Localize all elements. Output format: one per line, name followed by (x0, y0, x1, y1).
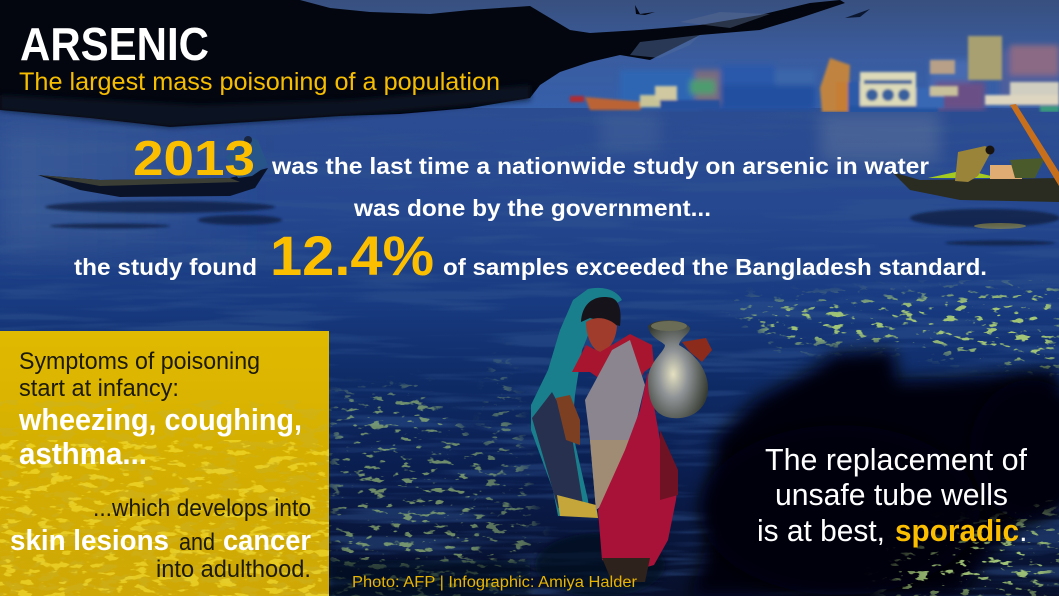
oar (1010, 104, 1059, 186)
dark shadow lower right (330, 350, 1059, 596)
text: symptoms intro: start at infancy: (19, 375, 179, 402)
text: later development: skin lesions (10, 525, 169, 557)
lower dark reflection (535, 533, 665, 596)
text: early symptoms (18, 402, 302, 471)
text: symptoms intro (19, 348, 260, 402)
raised hand (556, 395, 580, 445)
callout: tube wells: is at best, (757, 513, 885, 548)
scarf (531, 288, 622, 516)
vendor (955, 146, 992, 182)
big number: 2013: 2013 (133, 132, 255, 186)
callout: tube wells: The replacement of (765, 442, 1027, 477)
callout: tube wells: sporadic (895, 513, 1019, 548)
callout: tube wells (757, 442, 1028, 548)
text: early symptoms: asthma... (19, 436, 147, 471)
callout: tube wells: unsafe tube wells (775, 477, 1008, 512)
text: symptoms intro: Symptoms of poisoning (19, 348, 260, 375)
sky (0, 0, 1059, 115)
text: later development (10, 495, 311, 583)
text: later development: and (179, 529, 215, 556)
right ferry (985, 82, 1059, 112)
red sash (572, 334, 654, 400)
algae lower right corner (860, 500, 1059, 596)
text: the study found: the study found (74, 254, 257, 280)
yellow tower (968, 36, 1002, 80)
reflection (45, 201, 282, 228)
floating algae (300, 280, 1059, 596)
text: later development: ...which develops into (93, 495, 311, 522)
text: later development: cancer (223, 525, 311, 557)
black brush stroke top (0, 0, 870, 127)
title: ARSENIC (20, 18, 209, 70)
subtitle: The largest mass poisoning of a population (19, 68, 500, 96)
distant skyline (570, 36, 1059, 113)
hair and face (581, 297, 621, 326)
text: done by government: was done by the government... (353, 195, 711, 221)
woman with water pot (531, 288, 712, 596)
arm holding pot (682, 338, 712, 362)
left boat with boatman (38, 136, 282, 228)
text: last nationwide study: was the last time a nationwide study on arsenic in water (271, 153, 929, 179)
panel: yellow symptoms box (0, 331, 329, 596)
right boat with vendor (892, 104, 1059, 246)
boatman (226, 136, 268, 178)
blouse / sari grey (585, 340, 645, 510)
red skirt (598, 372, 678, 572)
text: later development: into adulthood. (156, 556, 311, 583)
orange boat far (570, 86, 720, 110)
ferry (820, 58, 958, 113)
big number: 12.4%: 12.4% (270, 224, 434, 287)
photo credit: Photo: AFP | Infographic: Amiya Halder (352, 574, 638, 591)
silver pot (648, 320, 708, 418)
text: early symptoms: wheezing, coughing, (18, 402, 302, 437)
callout: tube wells: . (1019, 513, 1028, 548)
text: exceeded standard: of samples exceeded the Bangladesh standard. (443, 254, 987, 280)
